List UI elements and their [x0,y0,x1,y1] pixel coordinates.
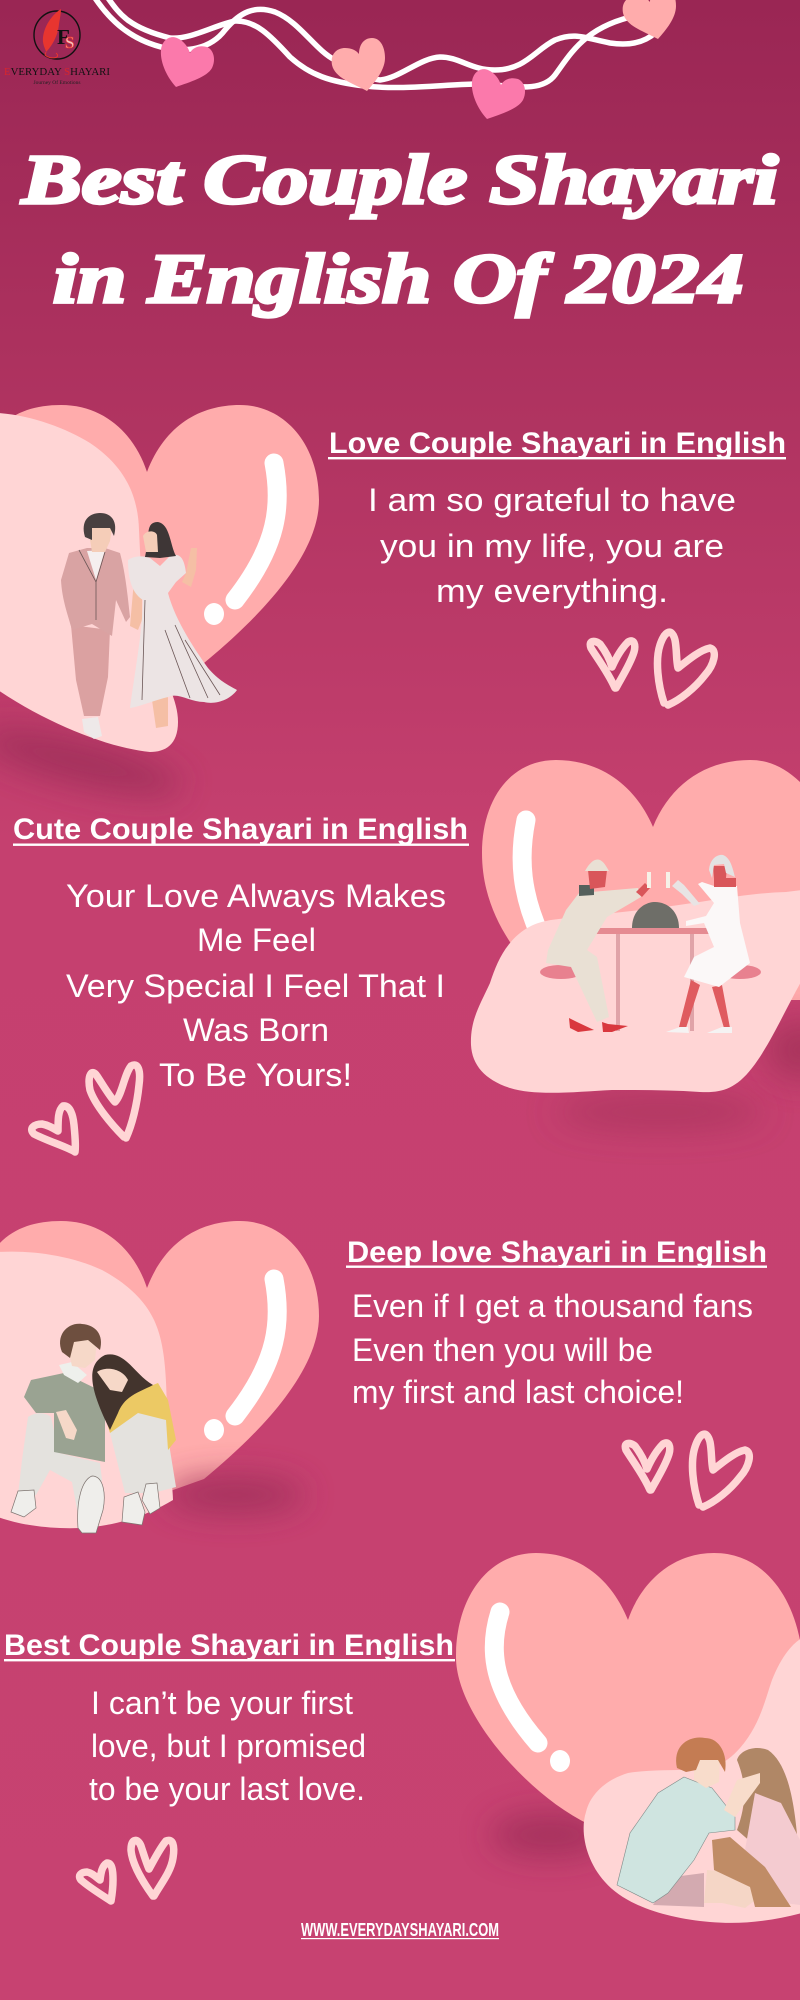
text block: deep love verse [352,1288,753,1410]
large heart [482,760,800,1000]
logo: Everyday Shayari: EVERYDAY SHAYARI [4,67,111,78]
text block: deep love verse: my first and last choice! [352,1374,684,1410]
heading: Love Couple Shayari in English: Love Couple Shayari in English [329,427,786,460]
peach heart [332,38,385,91]
pale blob [584,1638,800,1923]
title [21,142,779,318]
title: in English Of 2024 [53,241,743,318]
shadow [165,1477,305,1513]
illustration: couple walking [61,513,237,739]
heart highlight dot [204,603,224,625]
large heart [0,405,319,740]
text block: cute couple verse: Me Feel [197,922,316,958]
text block: love couple verse: you in my life, you are [380,528,724,564]
shadow [765,1020,800,1080]
text block: best couple verse: to be your last love. [89,1771,365,1807]
text block: best couple verse [89,1685,366,1807]
heading: Deep love Shayari in English: Deep love Shayari in English [347,1236,767,1269]
large heart [0,1221,319,1516]
heart highlight dot [550,1750,570,1772]
ribbons [95,0,655,88]
shadow [490,1813,610,1857]
text block: cute couple verse: To Be Yours! [159,1057,352,1093]
text block: deep love verse: Even then you will be [352,1332,653,1368]
heart highlight swoosh [235,1279,277,1416]
icon: outline hearts [80,1840,174,1901]
text block: love couple verse: my everything. [436,573,668,609]
shadow [0,715,187,809]
text block: cute couple verse: Very Special I Feel That I [66,968,445,1004]
large heart [456,1553,800,1825]
text block: cute couple verse: Your Love Always Makes [66,878,446,914]
logo: Everyday Shayari: Journey Of Emotions [33,79,81,86]
heart garland [95,0,676,119]
icon: outline hearts [625,1434,749,1507]
heart highlight dot [204,1419,224,1441]
text block: deep love verse: Even if I get a thousand fans [352,1288,753,1324]
title: Best Couple Shayari [21,142,779,219]
text block: love couple verse [368,482,736,609]
heading: Cute Couple Shayari in English: Cute Couple Shayari in English [13,813,468,846]
pale blob [0,413,178,752]
icon: outline hearts [590,632,714,705]
illustration: couple sitting [11,1324,176,1533]
logo: Everyday Shayari [4,9,111,86]
panel: deep love [0,1221,319,1533]
pink heart [472,69,525,119]
panel: cute couple [471,760,800,1130]
text block: best couple verse: love, but I promised [91,1728,366,1764]
text block: cute couple verse [66,878,446,1093]
logo: Everyday Shayari: S [65,33,74,52]
illustration: couple dining [540,855,761,1033]
pale blob [0,1252,173,1528]
heart highlight swoosh [522,820,540,935]
logo: Everyday Shayari: F [57,25,70,49]
table [594,902,715,1031]
footer: website URL: WWW.EVERYDAYSHAYARI.COM [301,1920,499,1940]
peach heart [623,0,676,39]
pink heart [161,37,214,87]
illustration: couple facing [617,1737,800,1908]
heart highlight swoosh [494,1612,538,1743]
heart highlight swoosh [235,463,277,600]
panel: love couple [0,405,319,809]
panel: best couple [456,1553,800,1923]
pale blob [471,890,800,1093]
text block: best couple verse: I can’t be your first [91,1685,353,1721]
text block: love couple verse: I am so grateful to have [368,482,736,518]
shadow [555,1094,765,1130]
heading: Best Couple Shayari in English: Best Couple Shayari in English [4,1629,454,1662]
text block: cute couple verse: Was Born [183,1012,329,1048]
icon: outline hearts [32,1065,140,1152]
